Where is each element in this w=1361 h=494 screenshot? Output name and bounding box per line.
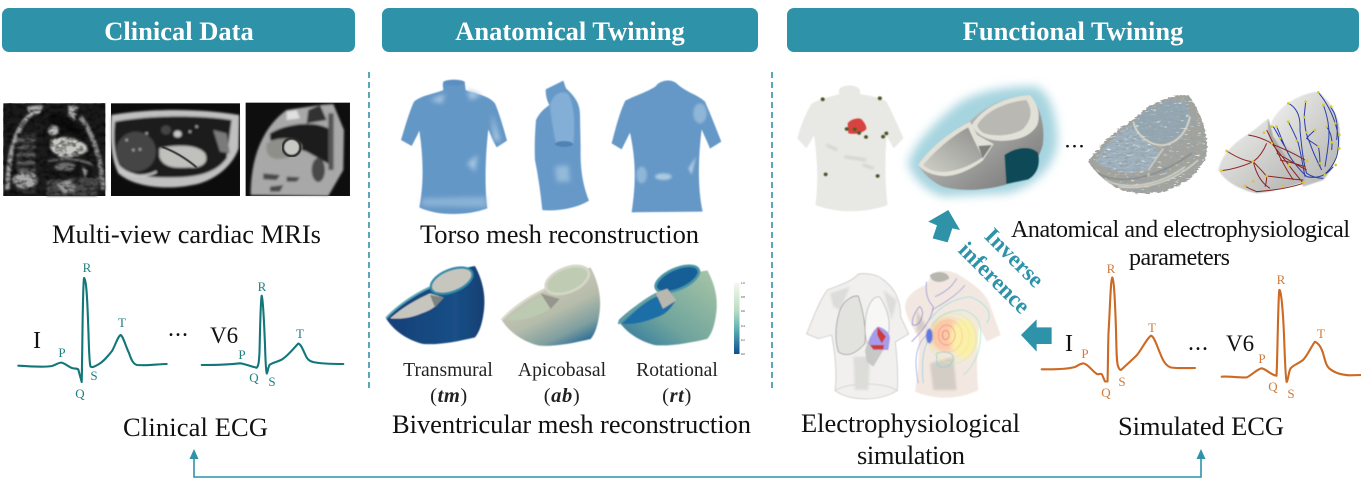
chart: clinical ECG lead V6: S bbox=[268, 374, 276, 389]
label: Transmural (tm): Transmural bbox=[403, 360, 493, 381]
chart: clinical ECG lead V6 bbox=[202, 279, 343, 389]
colour bar legend: 0.0 bbox=[741, 352, 745, 356]
heart: transmural bbox=[386, 262, 484, 344]
label: Transmural (tm) bbox=[403, 360, 493, 407]
colour bar legend: 0.8 bbox=[741, 295, 745, 299]
torso: front view bbox=[401, 80, 507, 214]
label: Inverse inference: Inverse bbox=[980, 223, 1049, 292]
colour bar legend: 1.0 bbox=[741, 281, 745, 285]
caption: Electrophysiological simulation bbox=[801, 408, 1020, 470]
torso with lungs and heart bbox=[807, 274, 909, 399]
torso: back view bbox=[612, 81, 721, 212]
caption: Simulated ECG: Simulated ECG bbox=[1118, 411, 1284, 441]
torso with potential contour map bbox=[905, 271, 1001, 398]
chart: simulated ECG lead I: R bbox=[1107, 261, 1116, 276]
chart: simulated ECG lead I: Q bbox=[1101, 385, 1111, 400]
ellipsis between clinical leads: ... bbox=[168, 316, 188, 342]
chart: simulated ECG lead I: P bbox=[1081, 346, 1089, 361]
chart: clinical ECG lead V6: R bbox=[258, 279, 267, 294]
chart: simulated ECG lead V6: R bbox=[1277, 272, 1286, 287]
caption: Multi-view cardiac MRIs: Multi-view cardiac MRIs bbox=[52, 219, 321, 249]
header: Anatomical Twining: Anatomical Twining bbox=[455, 16, 685, 46]
highlighted heart model with glow bbox=[908, 86, 1057, 197]
MRI view: four chamber bbox=[111, 103, 240, 196]
Purkinje network heart bbox=[1218, 91, 1341, 193]
colour bar legend: 0.6 bbox=[741, 309, 745, 313]
header: Anatomical Twining bbox=[382, 8, 758, 52]
chart: clinical ECG lead I bbox=[18, 260, 167, 401]
label: Rotational (rt) bbox=[636, 360, 718, 407]
arrow: left to simulation bbox=[1021, 319, 1052, 352]
caption: Electrophysiological simulation: Electrophysiological bbox=[801, 408, 1020, 438]
arrow: connector between clinical and simulated ECG bbox=[190, 449, 1206, 477]
label: Apicobasal (ab): Apicobasal bbox=[518, 360, 607, 381]
ellipsis: ... bbox=[1065, 127, 1085, 152]
chart: simulated ECG lead V6: P bbox=[1258, 351, 1266, 366]
chart: clinical ECG lead I: I bbox=[33, 328, 41, 354]
caption: Electrophysiological simulation: simulation bbox=[857, 440, 965, 470]
caption: Biventricular mesh reconstruction: Biventricular mesh reconstruction bbox=[392, 409, 751, 439]
chart: clinical ECG lead V6: Q bbox=[249, 370, 259, 385]
panel: electrophysiological simulation bbox=[807, 271, 1001, 399]
caption: Anatomical and electrophysiological parameters: Anatomical and electrophysiological bbox=[1011, 217, 1350, 243]
chart: clinical ECG lead V6: V6 bbox=[210, 323, 238, 348]
panel: biventricular meshes bbox=[386, 260, 717, 346]
chart: clinical ECG lead I: Q bbox=[75, 386, 85, 401]
chart: simulated ECG lead I: I bbox=[1065, 331, 1073, 357]
label: Inverse inference: inference bbox=[954, 237, 1035, 318]
arrow: up-left to parameters bbox=[928, 210, 960, 242]
panel: torso meshes bbox=[401, 80, 721, 214]
label: Rotational (rt): Rotational bbox=[636, 360, 718, 381]
heart: apicobasal bbox=[502, 260, 600, 346]
panel: cardiac MRI images bbox=[3, 103, 350, 196]
chart: clinical ECG lead I: P bbox=[58, 345, 66, 360]
ellipsis between simulated leads: ... bbox=[1188, 330, 1208, 356]
chart: clinical ECG lead I: T bbox=[118, 315, 126, 330]
caption: Clinical ECG: Clinical ECG bbox=[123, 412, 268, 442]
MRI view: short axis bbox=[246, 103, 350, 196]
chart: simulated ECG lead V6: S bbox=[1287, 386, 1295, 401]
chart: clinical ECG lead V6: T bbox=[296, 326, 304, 341]
caption: Torso mesh reconstruction: Torso mesh reconstruction bbox=[420, 219, 699, 249]
label: Apicobasal (ab): (ab) bbox=[544, 385, 580, 407]
label: Apicobasal (ab) bbox=[518, 360, 607, 407]
chart: clinical ECG lead I: S bbox=[90, 368, 98, 383]
caption: Anatomical and electrophysiological parameters: parameters bbox=[1129, 245, 1230, 271]
header: Clinical Data bbox=[2, 8, 355, 52]
chart: simulated ECG lead V6: V6 bbox=[1226, 331, 1254, 356]
heart: rotational bbox=[618, 260, 717, 345]
chart: simulated ECG lead V6: T bbox=[1317, 326, 1325, 341]
label: Transmural (tm): (tm) bbox=[430, 385, 468, 407]
colour bar legend: 0.2 bbox=[741, 338, 745, 342]
header: Functional Twining bbox=[787, 8, 1359, 52]
colour bar legend bbox=[734, 281, 745, 356]
caption: Anatomical and electrophysiological parameters bbox=[1011, 217, 1350, 271]
chart: clinical ECG lead V6: P bbox=[238, 347, 246, 362]
header: Clinical Data: Clinical Data bbox=[104, 16, 254, 46]
header: Functional Twining: Functional Twining bbox=[963, 16, 1183, 46]
torso: side view bbox=[535, 81, 589, 210]
chart: simulated ECG lead V6: Q bbox=[1268, 379, 1278, 394]
chart: simulated ECG lead I: S bbox=[1118, 374, 1126, 389]
chart: simulated ECG lead I: T bbox=[1148, 320, 1156, 335]
heart fibre model bbox=[1088, 95, 1207, 194]
chart: clinical ECG lead I: R bbox=[83, 260, 92, 275]
colour bar legend: 0.4 bbox=[741, 324, 745, 328]
label: Rotational (rt): (rt) bbox=[662, 385, 692, 407]
panel: model parameters bbox=[797, 85, 1085, 211]
chart: simulated ECG lead V6 bbox=[1222, 272, 1361, 401]
chart: simulated ECG lead I bbox=[1042, 261, 1195, 400]
MRI view: coronal bbox=[3, 103, 105, 196]
torso with electrodes bbox=[797, 85, 903, 211]
